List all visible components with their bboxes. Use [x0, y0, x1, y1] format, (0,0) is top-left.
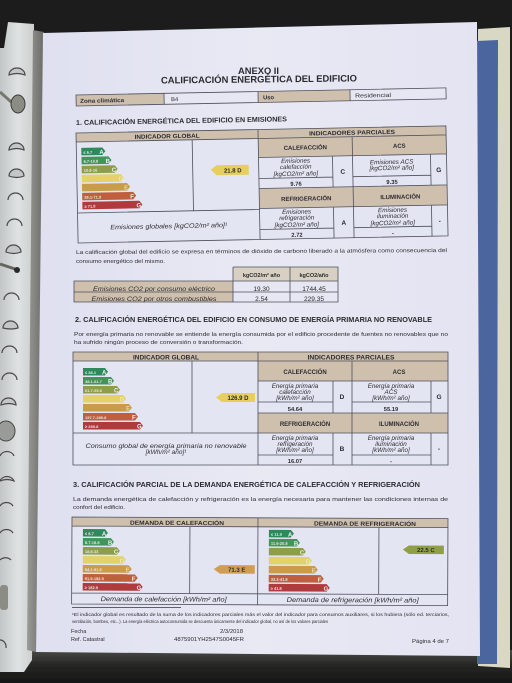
- cooling primary energy cell: B: [340, 446, 345, 453]
- hot water emissions cell: [kgCO2/m² año]: [368, 165, 414, 172]
- title: ANEXO II: [238, 66, 279, 77]
- energy rating scale: [83, 368, 143, 430]
- rating pointer: 71.3 E: 71.3 E: [228, 568, 245, 574]
- hot water emissions cell: G: [436, 167, 441, 174]
- text block: emissions explanation: consumo energético del mismo.: [76, 259, 166, 265]
- binder sleeve with punched holes: [0, 22, 44, 672]
- cooling primary energy cell: [kWh/m² año]: [275, 447, 314, 454]
- cooling demand rating scale: 11.9-20.8: [271, 541, 288, 546]
- energy rating scale: A: [102, 370, 107, 376]
- table: CO2 emissions: 19.30: [253, 286, 270, 293]
- hot water emissions cell: 9.35: [386, 180, 398, 186]
- energy rating scale: 6.7-10.8: [83, 159, 99, 164]
- energy rating scale: 61.7-95.8: [85, 388, 103, 393]
- bottom surface: [0, 650, 512, 683]
- cooling demand rating scale: [269, 530, 330, 593]
- panel: section 1 emissions table: CALEFACCIÓN: [284, 143, 327, 152]
- text block: demand explanation: La demanda energética de calefacción y refrigeración es la energía necesaria para mantener las condiciones internas de: [73, 497, 448, 503]
- energy rating scale: C: [114, 388, 119, 394]
- heating demand rating scale: 91.9-182.9: [85, 576, 105, 581]
- climate zone and use row: Residencial: [355, 93, 391, 100]
- hot water primary energy cell: 55.19: [384, 407, 399, 413]
- cooling demand rating scale: 33.3-41.8: [271, 577, 288, 582]
- heating primary energy cell: calefacción: [279, 389, 311, 396]
- energy rating scale: D: [119, 177, 124, 183]
- table: CO2 emissions: [74, 267, 338, 303]
- lighting primary energy cell: -: [390, 459, 392, 465]
- heating emissions cell: [kgCO2/m² año]: [273, 170, 318, 178]
- energy rating scale: E: [126, 406, 130, 412]
- energy rating scale: 157.7-289.8: [85, 415, 107, 420]
- energy rating scale: D: [120, 398, 125, 404]
- lighting primary energy cell: [kWh/m² año]: [371, 447, 410, 454]
- table: CO2 emissions: Emisiones CO2 por otros combustibles: [92, 296, 217, 303]
- lighting primary energy cell: -: [438, 446, 440, 453]
- panel: section 2 primary energy table: INDICADORES PARCIALES: [308, 356, 394, 362]
- panel: section 1 emissions table: ACS: [393, 144, 406, 150]
- text block: emissions explanation: La calificación global del edificio se expresa en términos de dióxido de carbono liberado a la atmósfera como consecuencia del: [76, 248, 447, 256]
- energy rating scale: 38.1-71.9: [84, 195, 102, 200]
- table: CO2 emissions: 2.54: [255, 296, 268, 303]
- lighting primary energy cell: iluminación: [375, 441, 407, 448]
- panel: section 3 demand table: [72, 517, 448, 606]
- hot water emissions cell: [368, 158, 442, 186]
- document footer: 2/3/2018: [220, 629, 243, 635]
- hot water primary energy cell: [kWh/m² año]: [371, 395, 410, 402]
- header bands: [73, 352, 448, 433]
- footnote: [72, 608, 449, 624]
- table: CO2 emissions: 229.35: [304, 296, 324, 303]
- energy rating scale: A: [99, 150, 104, 156]
- heating emissions cell: Emisiones: [281, 157, 311, 165]
- climate zone and use row: Zona climática: [80, 98, 125, 105]
- panel: section 2 primary energy table: INDICADOR GLOBAL: [133, 356, 199, 362]
- energy rating scale: F: [130, 194, 134, 200]
- table: CO2 emissions: kgCO2/m² año: [243, 272, 281, 279]
- heating demand rating scale: G: [137, 586, 142, 592]
- heating demand rating scale: E: [126, 568, 130, 574]
- lighting emissions cell: [kgCO2/m² año]: [370, 220, 415, 227]
- cooling primary energy cell: [272, 435, 345, 465]
- title: CALIFICACIÓN ENERGÉTICA DEL EDIFICIO: [161, 72, 357, 86]
- cooling demand rating scale: ≤ 11.9: [271, 532, 283, 537]
- title: [161, 66, 357, 86]
- binder rings: [0, 92, 25, 610]
- cooling emissions cell: A: [341, 220, 346, 227]
- cooling emissions cell: [kgCO2/m² año]: [274, 221, 319, 229]
- energy rating scale: G: [137, 424, 142, 430]
- energy rating scale: 38.1-61.7: [85, 379, 103, 384]
- heating demand rating scale: A: [102, 532, 107, 538]
- cooling demand rating scale: C: [300, 550, 305, 557]
- panel: section 1 emissions table: REFRIGERACIÓN: [281, 194, 332, 203]
- panel: section 3 demand table: Demanda de calefacción [kWh/m² año]: [101, 596, 228, 604]
- cooling demand rating scale: ≥ 41.8: [271, 586, 283, 591]
- heating demand rating scale: [83, 529, 143, 592]
- panel: section 1 emissions table: INDICADOR GLOBAL: [135, 134, 200, 141]
- heading: section 3: 3. CALIFICACIÓN PARCIAL DE LA DEMANDA ENERGÉTICA DE CALEFACCIÓN Y REFRIGERACIÓN: [73, 480, 420, 489]
- climate zone and use row: [76, 88, 446, 106]
- heating emissions cell: 9.76: [290, 182, 303, 188]
- header bands: [76, 126, 447, 212]
- panel: section 1 emissions table: ILUMINACIÓN: [380, 192, 420, 201]
- energy rating scale: F: [132, 416, 136, 422]
- panel: section 1 emissions table: Emisiones globales [kgCO2/m² año]¹: [110, 222, 228, 231]
- heating demand rating scale: D: [120, 559, 125, 565]
- document footer: Página 4 de 7: [412, 639, 449, 645]
- cooling primary energy cell: Energía primaria: [272, 435, 319, 442]
- energy rating scale: B: [108, 380, 113, 386]
- energy rating scale: 10.8-16: [84, 168, 98, 173]
- heating demand rating scale: ≤ 8.7: [85, 531, 95, 536]
- rating pointer: 126.9 D: 126.9 D: [227, 396, 249, 402]
- energy rating scale: ≤ 38.1: [85, 370, 97, 375]
- heating primary energy cell: D: [340, 394, 345, 401]
- lighting emissions cell: [369, 206, 441, 237]
- climate zone and use row: Uso: [263, 95, 275, 101]
- heating demand rating scale: 54.1-91.9: [85, 567, 102, 572]
- table: CO2 emissions: 1744.45: [302, 286, 326, 293]
- cooling emissions cell: 2.72: [291, 233, 303, 239]
- document footer: 4875901YH2547S0045FR: [174, 637, 244, 643]
- footnote: ¹El indicador global es resultado de la suma de los indicadores parciales más el valor del indicador para consumos auxiliares, si los hubiera (sólo ed. terciarios,: [72, 612, 449, 617]
- cooling demand rating scale: F: [318, 578, 322, 584]
- rating pointer: 22.5 C: 22.5 C: [417, 548, 435, 554]
- text block: emissions explanation: [76, 248, 447, 265]
- rating pointer: 71.3 E: [214, 565, 255, 574]
- energy rating scale: [81, 147, 142, 210]
- cooling demand rating scale: B: [294, 541, 299, 547]
- climate zone and use row: B4: [171, 97, 179, 103]
- panel: section 3 demand table: Demanda de refrigeración [kWh/m² año]: [287, 597, 420, 605]
- heating emissions cell: [272, 157, 346, 188]
- lighting primary energy cell: Energía primaria: [368, 435, 415, 442]
- heading: section 2: 2. CALIFICACIÓN ENERGÉTICA DEL EDIFICIO EN CONSUMO DE ENERGÍA PRIMARIA NO RENOVABLE: [75, 315, 432, 324]
- panel: section 3 demand table: DEMANDA DE CALEFACCIÓN: [130, 519, 224, 527]
- hot water primary energy cell: G: [436, 394, 442, 401]
- cooling emissions cell: Emisiones: [282, 208, 312, 216]
- heating emissions cell: C: [340, 169, 346, 176]
- lighting emissions cell: Emisiones: [378, 207, 408, 214]
- panel: section 2 primary energy table: [73, 352, 448, 465]
- energy rating scale: B: [106, 159, 111, 165]
- rating pointer: 126.9 D: [216, 393, 255, 402]
- cooling demand rating scale: A: [288, 532, 293, 538]
- rating pointer: 22.5 C: [403, 545, 444, 554]
- cooling demand rating scale: G: [324, 587, 329, 593]
- heating demand rating scale: 8.7-18.8: [85, 540, 100, 545]
- lighting primary energy cell: [368, 435, 440, 465]
- table: CO2 emissions: Emisiones CO2 por consumo eléctrico: [93, 286, 215, 293]
- cooling primary energy cell: refrigeración: [278, 441, 313, 448]
- hot water primary energy cell: Energía primaria: [368, 383, 415, 390]
- panel: section 2 primary energy table: ACS: [393, 370, 405, 376]
- panel: section 1 emissions table: [76, 126, 448, 243]
- text block: primary energy explanation: [74, 332, 448, 346]
- table: CO2 emissions: kgCO2/año: [299, 273, 329, 279]
- hot water emissions cell: Emisiones ACS: [370, 159, 414, 166]
- heating demand rating scale: 18.8-33: [85, 549, 99, 554]
- global consumption label: Consumo global de energía primaria no renovable: [86, 443, 247, 450]
- text block: demand explanation: [73, 497, 448, 511]
- hot water primary energy cell: [368, 383, 442, 413]
- document footer: Ref. Catastral: [71, 637, 105, 643]
- text block: primary energy explanation: Por energía primaria no renovable se entiende la energía consumida por el edificio procedente de fuentes no renovables que no: [74, 332, 448, 338]
- heating primary energy cell: [272, 383, 345, 413]
- lighting emissions cell: iluminación: [377, 213, 409, 220]
- energy rating scale: ≤ 6.7: [83, 150, 93, 155]
- panel: section 2 primary energy table: ILUMINACIÓN: [379, 420, 419, 428]
- panel: section 2 primary energy table: CALEFACCIÓN: [283, 368, 327, 376]
- energy rating scale: E: [124, 186, 128, 192]
- panel: section 1 emissions table: INDICADORES PARCIALES: [309, 130, 395, 138]
- cooling primary energy cell: 16.07: [288, 459, 302, 465]
- cooling demand rating scale: E: [312, 569, 316, 575]
- heating demand rating scale: F: [132, 577, 136, 583]
- rating pointer: 21.8 D: 21.8 D: [224, 168, 242, 175]
- heating primary energy cell: [kWh/m² año]: [275, 395, 314, 402]
- heading: section 1: 1. CALIFICACIÓN ENERGÉTICA DEL EDIFICIO EN EMISIONES: [76, 114, 287, 127]
- document footer: [71, 629, 449, 645]
- folder cover: cream edge: [478, 27, 510, 668]
- heating demand rating scale: ≥ 182.9: [85, 585, 99, 590]
- heating demand rating scale: C: [114, 550, 119, 556]
- heating emissions cell: calefacción: [280, 163, 312, 171]
- cooling emissions cell: refrigeración: [279, 214, 315, 222]
- hot water primary energy cell: ACS: [384, 389, 398, 396]
- energy rating scale: C: [112, 168, 117, 174]
- global consumption label: [86, 443, 247, 456]
- folder cover: blue panel: [477, 40, 498, 664]
- panel: section 3 demand table: DEMANDA DE REFRIGERACIÓN: [314, 520, 416, 528]
- footnote: ventilación, bombeo, etc...). La energía eléctrica autoconsumida se descuenta únicamente del indicador global, no así de los valores parciales: [72, 619, 329, 624]
- energy rating scale: ≥ 289.8: [85, 424, 99, 429]
- heating demand rating scale: B: [108, 541, 113, 547]
- lighting emissions cell: -: [439, 218, 441, 225]
- heating primary energy cell: 54.64: [288, 407, 303, 413]
- cooling demand rating scale: D: [306, 560, 311, 566]
- cooling emissions cell: [273, 208, 347, 239]
- energy rating scale: ≥ 71.9: [84, 204, 96, 209]
- text block: primary energy explanation: ha sufrido ningún proceso de conversión o transformación.: [74, 340, 244, 346]
- energy rating scale: G: [136, 203, 141, 209]
- document footer: Fecha: [71, 629, 87, 635]
- text block: demand explanation: confort del edificio.: [73, 505, 126, 511]
- panel: section 2 primary energy table: REFRIGERACIÓN: [280, 420, 330, 428]
- global consumption label: [kWh/m² año]¹: [145, 449, 187, 456]
- lighting emissions cell: -: [392, 231, 394, 237]
- rating pointer: 21.8 D: [211, 165, 249, 175]
- heating primary energy cell: Energía primaria: [272, 383, 319, 390]
